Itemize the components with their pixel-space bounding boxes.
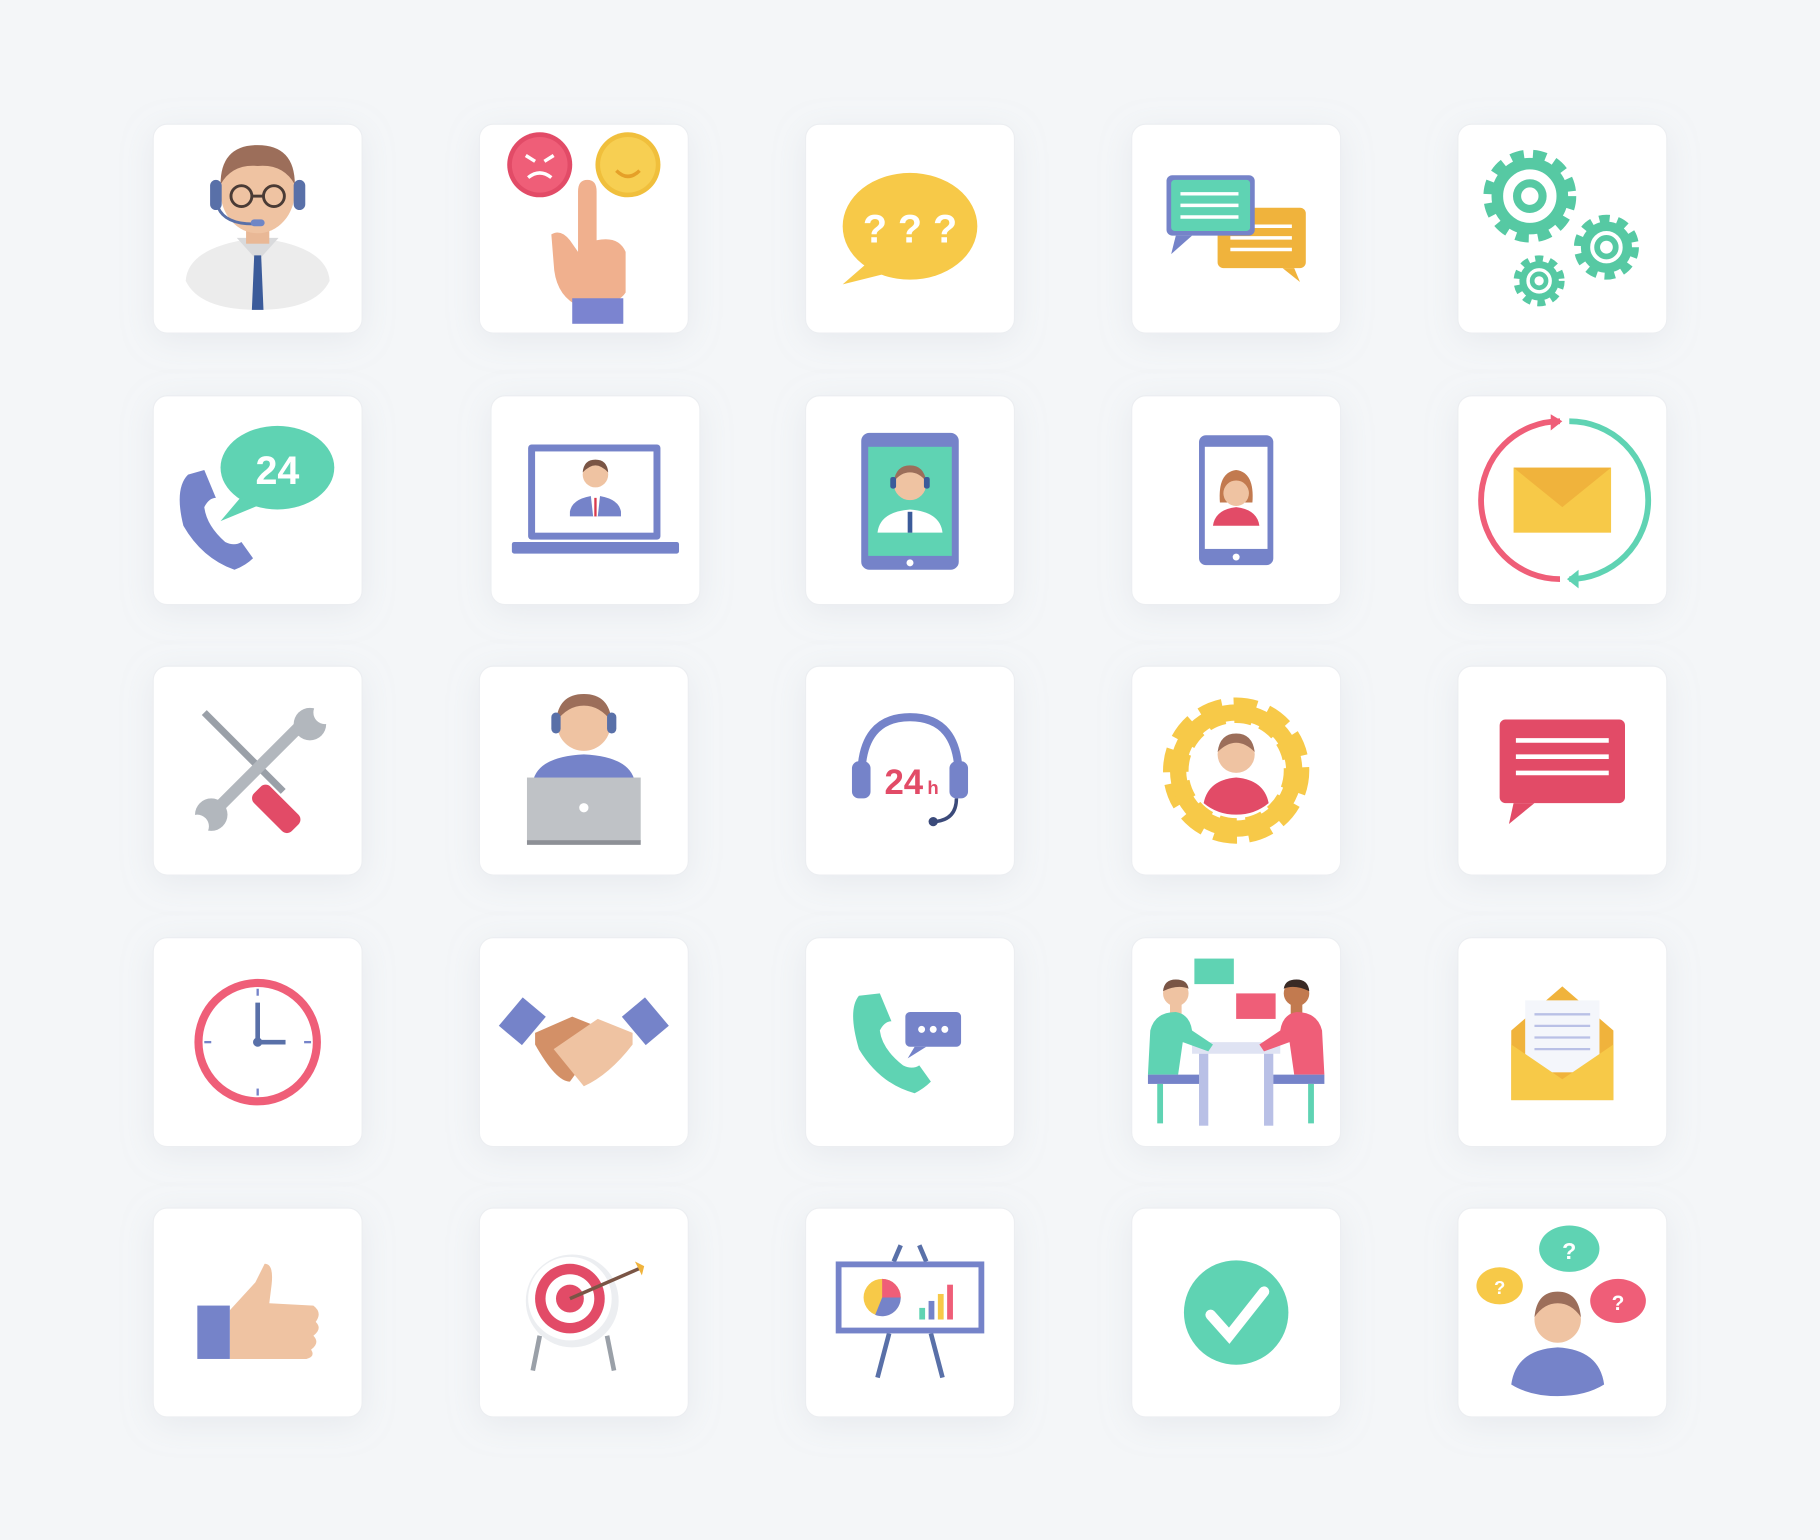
card: open envelope [1458, 938, 1667, 1147]
card: 24h headset: 24 [884, 763, 924, 802]
card: 24h headset [806, 666, 1014, 875]
card: user questions: ? [1612, 1292, 1624, 1315]
card: user questions: ? [1562, 1238, 1576, 1264]
card: handshake [479, 938, 688, 1147]
card: message bubble [1458, 666, 1667, 875]
card: 24h headset: h [927, 777, 939, 798]
card: email refresh [1458, 396, 1667, 605]
card: question bubble: ? ? ? [863, 208, 957, 252]
card: agent laptop [479, 666, 688, 875]
card: question bubble [806, 124, 1014, 333]
card: laptop agent [491, 396, 700, 605]
card: gears [1458, 124, 1667, 333]
card: phone chat [806, 938, 1014, 1147]
card: meeting [1132, 938, 1341, 1147]
card: user gear [1132, 666, 1341, 875]
card: user questions [1458, 1208, 1667, 1417]
card: support agent [153, 124, 362, 333]
card: user questions: ? [1494, 1277, 1505, 1298]
card: check [1132, 1208, 1341, 1417]
card: target [479, 1208, 688, 1417]
card: thumbs up [153, 1208, 362, 1417]
card: clock [153, 938, 362, 1147]
card: tools [153, 666, 362, 875]
card: tablet agent [806, 396, 1014, 605]
card: chat bubbles [1132, 124, 1341, 333]
card: 24 phone [153, 396, 362, 605]
card: 24 phone: 24 [255, 449, 299, 493]
card: presentation board [806, 1208, 1014, 1417]
card: feedback emoji hand [479, 124, 688, 333]
card: phone agent [1132, 396, 1341, 605]
